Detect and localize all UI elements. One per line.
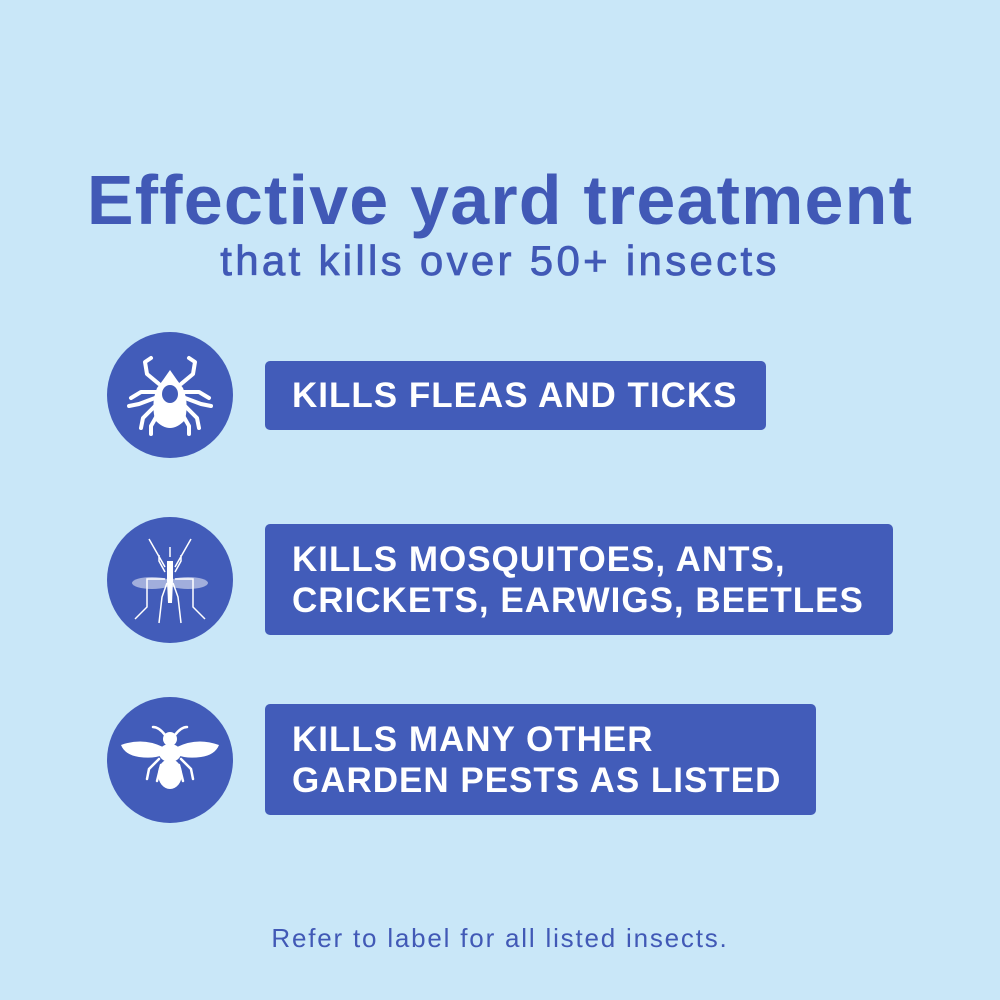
icon: tick xyxy=(107,332,233,458)
label: mosquitoes etc: CRICKETS, EARWIGS, BEETLES xyxy=(292,580,864,620)
label: mosquitoes etc: KILLS MOSQUITOES, ANTS, xyxy=(292,540,786,578)
icon: bee xyxy=(107,697,233,823)
icon: mosquito xyxy=(107,517,233,643)
label: garden pests: GARDEN PESTS AS LISTED xyxy=(292,760,781,800)
label: garden pests: KILLS MANY OTHER xyxy=(292,720,653,758)
title: Effective yard treatment xyxy=(87,161,913,239)
label: garden pests xyxy=(265,704,816,815)
label: mosquitoes etc xyxy=(265,524,893,635)
footer note: Refer to label for all listed insects. xyxy=(271,923,729,953)
label: fleas and ticks: KILLS FLEAS AND TICKS xyxy=(292,376,738,415)
label: fleas and ticks xyxy=(265,361,766,430)
subtitle: that kills over 50+ insects xyxy=(220,237,780,284)
